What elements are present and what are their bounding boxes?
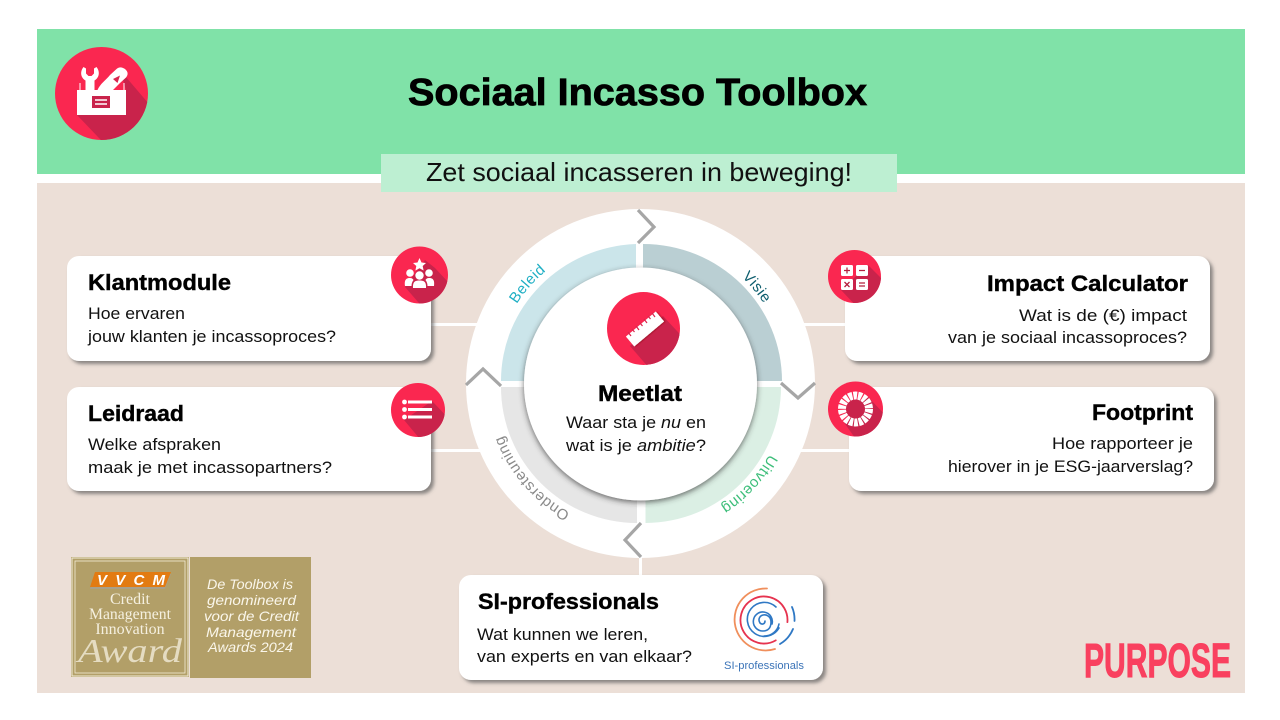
award text: Credit Management Innovation: [89, 591, 172, 638]
text: Meetlat question: [565, 413, 706, 455]
text: Klantmodule question: Hoe ervaren: [88, 304, 185, 323]
label: Visie: Visie: [744, 270, 769, 302]
heading: Footprint: Footprint: [1092, 400, 1194, 425]
center panel: Meetlat: [524, 268, 757, 500]
circular diagram: [465, 209, 816, 558]
label: Ondersteuning: Ondersteuning: [496, 436, 568, 520]
ring segment: Visie: [643, 244, 782, 381]
icon: list: [391, 383, 445, 437]
text: Impact question: Wat is de (€) impact: [1019, 306, 1187, 325]
logo: SI-professionals spiral: [732, 588, 796, 652]
award text: Credit Management Innovation: Innovation: [95, 621, 165, 638]
text: Leidraad question: Welke afspraken: [88, 435, 221, 454]
icon: toolbox: [55, 47, 148, 140]
label: Uitvoering: Uitvoering: [721, 456, 778, 512]
text: SI question: van experts en van elkaar?: [477, 647, 692, 666]
arrow: bottom: [625, 523, 641, 557]
logo text: SI-professionals: SI-professionals: [724, 660, 805, 672]
connector lines: [431, 324, 849, 575]
text: Impact question: van je sociaal incassoproces?: [948, 328, 1187, 347]
text: SI question: Wat kunnen we leren,: [477, 625, 648, 644]
title: Sociaal Incasso Toolbox: [408, 72, 867, 114]
content background: [37, 183, 1245, 693]
ring segment: Beleid: [501, 244, 636, 381]
award caption: [190, 557, 311, 678]
text: Meetlat question: Waar sta je nu en: [566, 413, 706, 432]
heading: SI-professionals: SI-professionals: [478, 589, 659, 614]
text: Klantmodule question: [87, 304, 336, 346]
text: Leidraad question: maak je met incassopartners?: [88, 458, 332, 477]
icon: calculator: [828, 250, 881, 303]
award caption: De Toolbox is: [207, 576, 293, 592]
icon: footprint ring: [828, 382, 883, 436]
text: Meetlat question: wat is je ambitie?: [565, 436, 706, 455]
award script: Award: Award: [76, 633, 183, 670]
award caption: Management: [206, 624, 297, 640]
award caption: genomineerd: [207, 592, 297, 608]
text: Footprint question: Hoe rapporteer je: [1052, 434, 1193, 453]
header band: [37, 29, 1245, 174]
text: SI question: [477, 625, 692, 666]
arrow: right: [781, 383, 815, 398]
label: Beleid: Beleid: [508, 264, 546, 303]
ring segment: Ondersteuning: [501, 387, 637, 523]
subtitle banner: [381, 154, 897, 192]
heading: Impact Calculator: Impact Calculator: [987, 271, 1188, 296]
award caption: Awards 2024: [207, 639, 293, 655]
award text: Credit Management Innovation: Management: [89, 606, 172, 623]
award badge: [71, 557, 189, 677]
panel: Leidraad: [67, 387, 431, 491]
heading: Klantmodule: Klantmodule: [88, 270, 231, 295]
ring segment: Uitvoering: [646, 387, 781, 523]
icon: ruler: [607, 292, 680, 365]
subtitle banner: Zet sociaal incasseren in beweging!: [426, 157, 852, 187]
award caption: voor de Credit: [204, 608, 300, 624]
heading: Meetlat: Meetlat: [598, 381, 683, 406]
panel: Footprint: [849, 387, 1214, 491]
arrow: left: [466, 369, 501, 386]
text: Klantmodule question: jouw klanten je incassoproces?: [87, 327, 336, 346]
text: Footprint question: hierover in je ESG-jaarverslag?: [948, 457, 1193, 476]
panel: SI-professionals: [459, 575, 823, 680]
text: Impact question: [948, 306, 1187, 347]
text: Leidraad question: [88, 435, 332, 477]
heading: Leidraad: Leidraad: [88, 401, 184, 426]
panel: Impact Calculator: [845, 256, 1210, 361]
panel: Klantmodule: [67, 256, 431, 361]
award text: Credit Management Innovation: Credit: [110, 591, 151, 608]
icon: people with star: [391, 246, 448, 304]
arrow: top: [638, 210, 654, 243]
text: Footprint question: [948, 434, 1193, 476]
award logo: VVCM: VVCM: [97, 572, 166, 589]
